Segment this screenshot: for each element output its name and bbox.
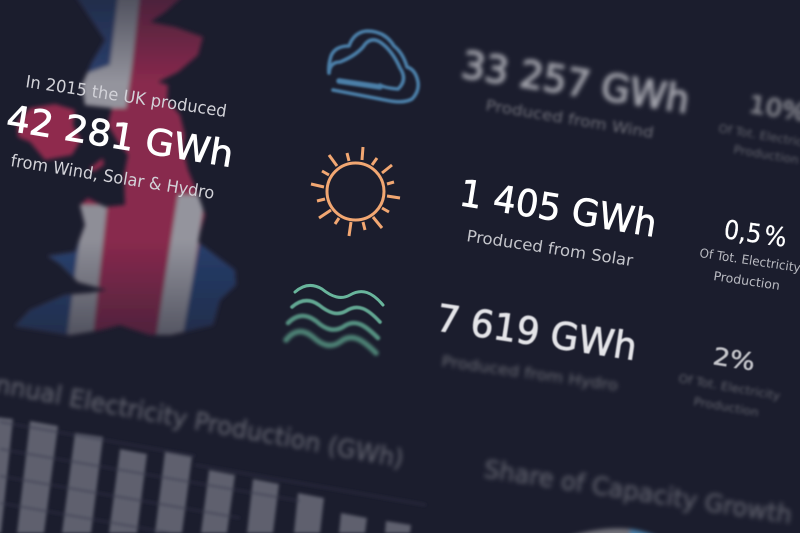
- stat: hydro GWh: 7 619 GWh: [434, 296, 640, 369]
- stat: produced from hydro: Produced from Hydro: [440, 352, 619, 395]
- pie chart top edge: [565, 528, 660, 533]
- chart grid lines: [0, 422, 426, 533]
- stat: produced from solar: Produced from Solar: [465, 226, 635, 270]
- chart title: share of capacity growth: Share of Capacity Growth: [482, 454, 794, 529]
- map: Northern Ireland: [17, 104, 81, 160]
- stat: wind percent caption: Production: [733, 142, 800, 167]
- icon: sun (solar): [311, 147, 400, 236]
- icon: waves (hydro): [286, 285, 383, 353]
- stat: hydro percent caption: Of Tot. Electricity: [677, 371, 782, 403]
- heading: In 2015 the UK produced: In 2015 the UK produced: [24, 72, 228, 122]
- stat: wind percent caption: [718, 121, 800, 167]
- stat: solar percent caption: [699, 245, 800, 293]
- stat: wind GWh: 33 257 GWh: [459, 43, 692, 122]
- stat: solar GWh: 1 405 GWh: [457, 171, 660, 246]
- stat: hydro percent caption: [677, 371, 782, 419]
- total figure: 42 281 GWh: [4, 98, 236, 176]
- stat: solar percent: 0,5 %: [722, 215, 789, 254]
- stat: hydro percent: 2%: [711, 342, 757, 376]
- icon: cloud (wind): [329, 31, 418, 102]
- bars: [0, 417, 411, 533]
- map: island: [90, 158, 104, 172]
- map: UK flag silhouette: [14, 0, 238, 337]
- stat: produced from wind: Produced from Wind: [484, 96, 655, 142]
- bar chart: [0, 417, 426, 533]
- subheading: from Wind, Solar & Hydro: from Wind, Solar & Hydro: [9, 151, 216, 204]
- stat: solar percent caption: Production: [713, 268, 781, 293]
- stat: hydro percent caption: Production: [692, 394, 760, 419]
